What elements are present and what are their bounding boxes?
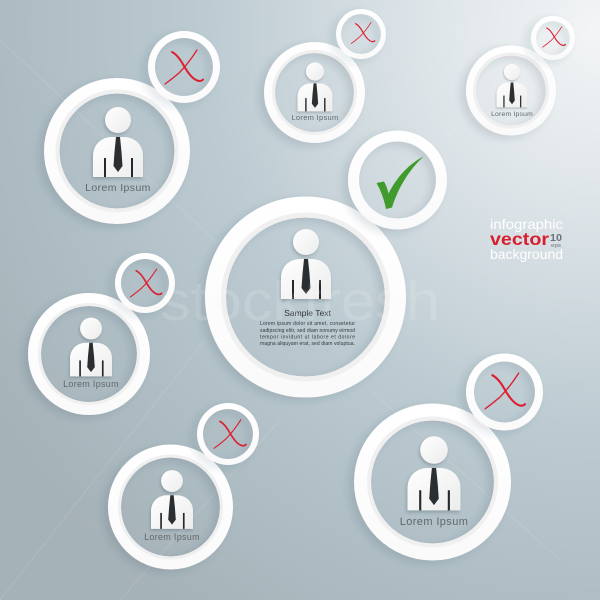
person: top-right — [496, 64, 528, 107]
badge: bottom-right cross — [466, 354, 543, 430]
ring: bottom-right person — [354, 404, 511, 560]
ring: central person — [205, 196, 406, 398]
badge: bottom-left cross — [197, 403, 259, 465]
label: top-right: Lorem Ipsum — [491, 111, 533, 118]
label: top-left: Lorem Ipsum — [85, 182, 151, 194]
label: bottom-left: Lorem Ipsum — [144, 532, 200, 542]
text block: central paragraph: tempor invidunt ut labore et dolore — [260, 334, 355, 340]
person: central — [281, 229, 331, 299]
person: bottom-left — [151, 470, 193, 529]
badge: top-right cross — [531, 16, 575, 60]
icon: left-middle cross — [130, 269, 162, 297]
icon: top-middle cross — [351, 22, 375, 44]
text block: central paragraph: sadipscing elitr, sed diam nonumy eirmod — [260, 328, 355, 334]
ring: left-middle person — [28, 293, 150, 415]
icon: bottom-right cross — [485, 373, 525, 409]
icon: green check — [376, 156, 424, 209]
badge: top-middle cross — [336, 9, 386, 59]
logo: infographic vector background: background — [490, 246, 563, 262]
watermark text: stockfresh — [160, 269, 440, 332]
label: bottom-right: Lorem Ipsum — [400, 516, 468, 528]
logo: infographic vector background: infographic — [490, 216, 563, 232]
text block: central paragraph: magna aliquyam erat, sed diam voluptua. — [260, 341, 355, 347]
badge: top-left cross — [148, 31, 220, 103]
heading: sample text: Sample Text — [284, 308, 331, 318]
icon: bottom-left cross — [214, 420, 246, 448]
logo: infographic vector background: vector — [490, 229, 549, 249]
ring: bottom-left person — [108, 445, 233, 570]
logo: infographic vector background — [490, 216, 563, 262]
text block: central paragraph — [260, 321, 355, 347]
icon: top-right cross — [543, 27, 565, 47]
logo: infographic vector background: 10 — [550, 232, 562, 244]
ring: top-middle person — [264, 42, 365, 143]
person: top-middle — [298, 62, 332, 111]
ring: top-right person — [466, 46, 556, 136]
person: left-middle — [70, 318, 112, 376]
badge: check — [348, 130, 447, 230]
badge: left-middle cross — [115, 253, 175, 313]
icon: top-left cross — [165, 50, 203, 84]
label: top-middle: Lorem Ipsum — [291, 113, 339, 122]
person: top-left — [93, 107, 143, 177]
person: bottom-right — [408, 436, 460, 510]
text block: central paragraph: Lorem ipsum dolor sit amet, consetetur — [260, 321, 355, 327]
ring: top-left person — [44, 78, 190, 224]
logo: infographic vector background: eps — [551, 243, 562, 249]
label: left-middle: Lorem Ipsum — [63, 379, 119, 389]
